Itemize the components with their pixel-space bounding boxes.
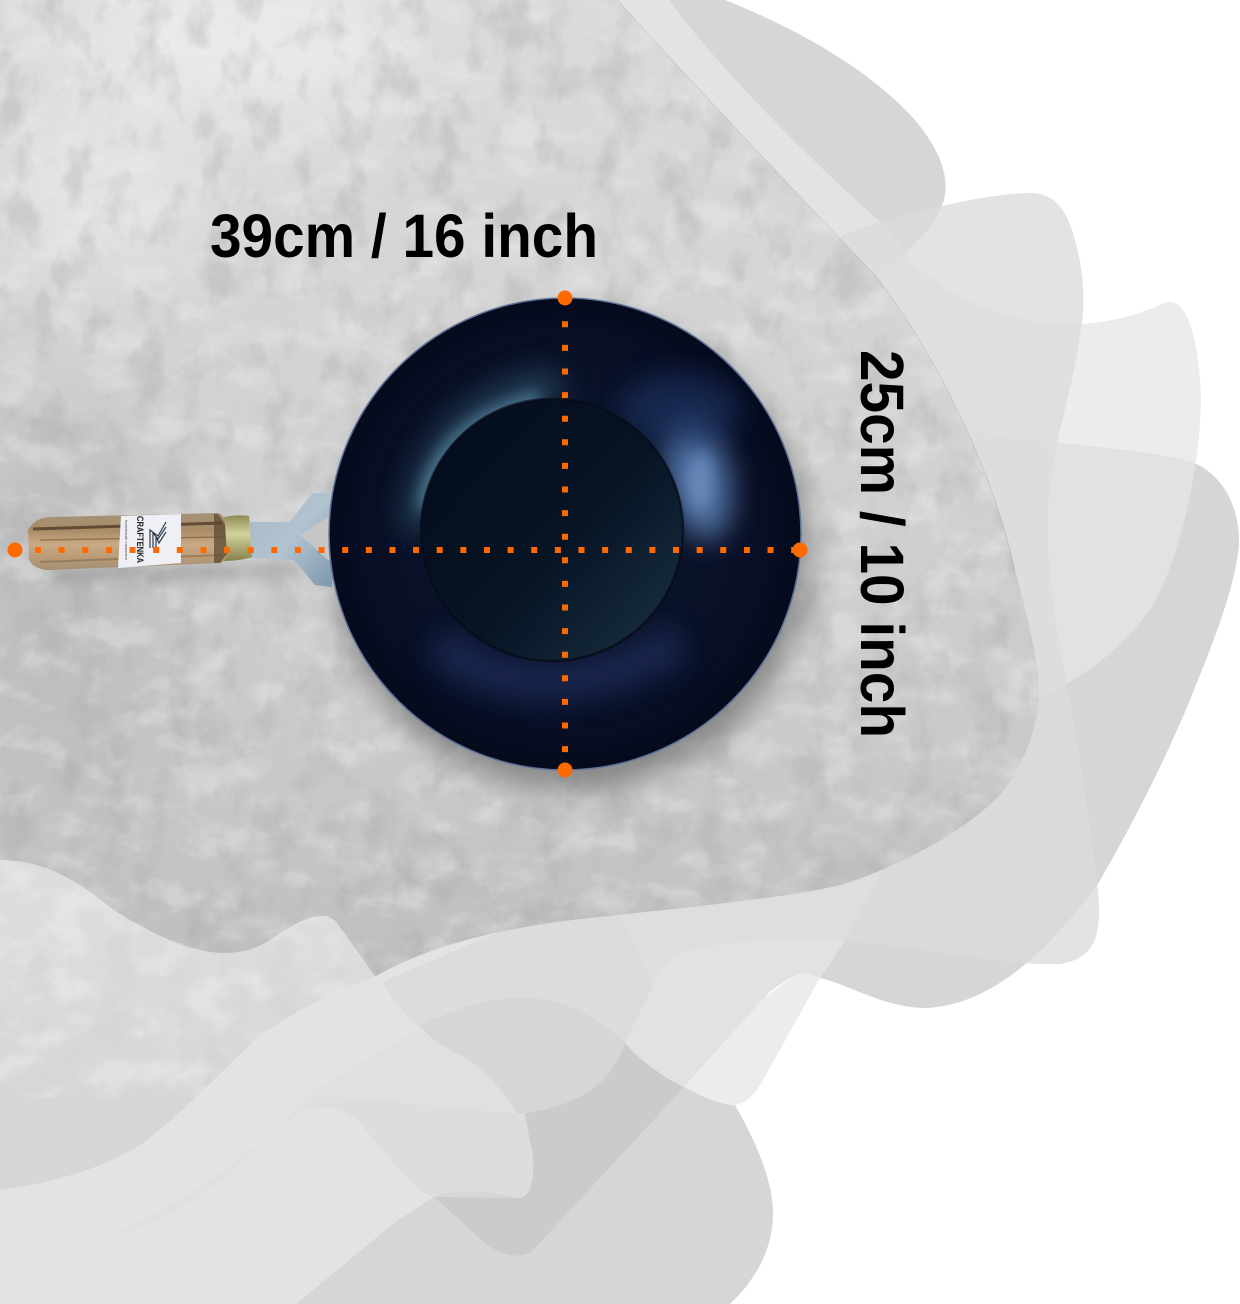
grip label: CRAFTENKA xyxy=(135,516,145,563)
background wave: lower band tint xyxy=(617,865,885,986)
grip label xyxy=(118,514,181,568)
background wave: translucent bottom-left shape over concrete xyxy=(0,860,400,1098)
heading: width label: 39cm / 16 inch xyxy=(210,202,598,270)
vertical dimension line xyxy=(558,290,572,778)
right wall sheen xyxy=(620,374,740,446)
left highlight glow xyxy=(418,385,560,530)
background wave: top petal xyxy=(660,0,946,277)
pan flat base xyxy=(421,399,683,661)
icon: black wok pan xyxy=(328,298,802,770)
background wave: palest lower petal xyxy=(684,974,820,1105)
background wave: right grey shape xyxy=(600,400,1239,1008)
panel: concrete surface xyxy=(0,0,1039,1098)
background wave: lower band base xyxy=(340,880,653,1113)
pan rim xyxy=(329,298,801,770)
background wave: dark wedge xyxy=(434,1043,684,1256)
background wave: light overlapping shape xyxy=(0,975,533,1304)
grip label: handmade cookware xyxy=(124,520,129,561)
icon: pan handle xyxy=(28,493,332,587)
background wave: bottom dark shape xyxy=(0,998,773,1304)
background wave: light lower petal xyxy=(625,940,845,1087)
handle shadow xyxy=(40,565,300,582)
bracket cut-out xyxy=(300,517,332,560)
wooden grip xyxy=(28,513,227,570)
background wave: large light shape xyxy=(340,193,1099,1113)
bottom sheen xyxy=(440,640,680,681)
left highlight xyxy=(424,398,540,510)
heading: height label: 25cm / 10 inch xyxy=(848,350,916,738)
handle bracket xyxy=(250,493,332,587)
icon: pan shadow xyxy=(334,314,810,790)
horizontal dimension line xyxy=(8,542,808,558)
right highlight xyxy=(654,411,742,545)
background wave: pale right petal xyxy=(800,225,1201,700)
concrete hairline edge xyxy=(618,0,1015,570)
background wave: left grey block xyxy=(0,1098,400,1304)
brass ferrule xyxy=(222,515,252,561)
background wave: top light strip xyxy=(618,0,906,277)
background wave: inner fold shade xyxy=(306,1096,533,1198)
background wave: overlap band xyxy=(420,998,625,1113)
background wave: inner fold xyxy=(15,1028,533,1265)
